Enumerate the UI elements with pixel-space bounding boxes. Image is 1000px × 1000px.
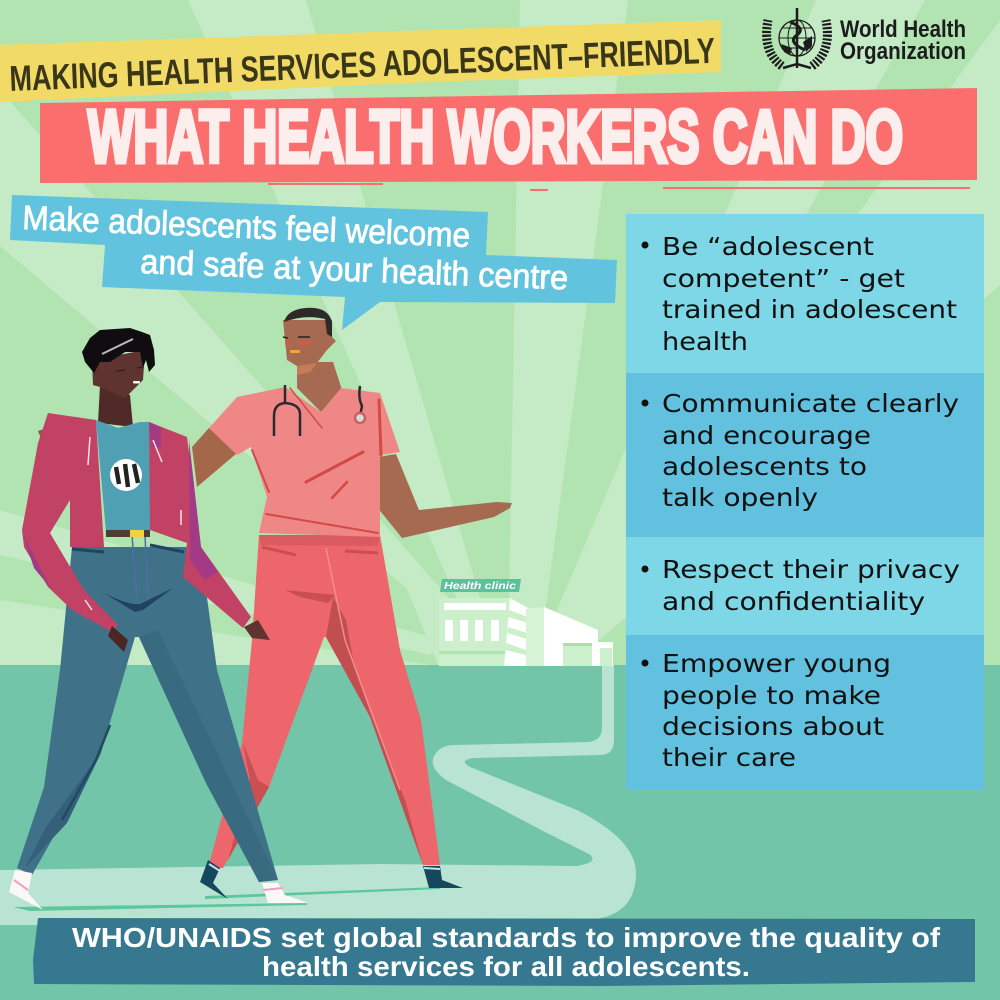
action 1: competent” - get bbox=[662, 264, 905, 293]
nurse shoes bbox=[200, 860, 463, 899]
foot shadows bbox=[13, 887, 440, 911]
action 4: their care bbox=[662, 743, 796, 772]
hand bbox=[108, 626, 128, 652]
neck and head bbox=[82, 328, 155, 427]
action 2 bbox=[626, 373, 984, 537]
nurse neck and head bbox=[283, 308, 342, 412]
action 4: people to make bbox=[662, 681, 881, 710]
shoes white bbox=[9, 870, 308, 910]
action 3 bbox=[626, 537, 984, 635]
panel: actions bbox=[626, 214, 984, 790]
action 1: Be “adolescent bbox=[662, 232, 874, 261]
speech bubble bbox=[10, 195, 617, 330]
footer banner: WHO/UNAIDS set global standards to improve the quality of bbox=[72, 922, 941, 953]
action 1 bbox=[626, 214, 984, 373]
speech bubble: Make adolescents feel welcome bbox=[22, 199, 471, 255]
yellow banner: MAKING HEALTH SERVICES ADOLESCENT–FRIENDLY bbox=[9, 30, 716, 99]
action 1: health bbox=[662, 327, 748, 356]
nurse left arm bbox=[38, 427, 52, 441]
young person bbox=[9, 328, 308, 910]
clinic label: Health clinic bbox=[444, 581, 517, 592]
WHO emblem bbox=[767, 8, 827, 68]
t-shirt bbox=[96, 420, 150, 537]
jacket bbox=[22, 413, 251, 632]
action 3: and confidentiality bbox=[662, 587, 925, 616]
nurse bbox=[38, 308, 512, 868]
action 4: Empower young bbox=[662, 649, 891, 678]
nurse scrub top bbox=[209, 387, 400, 537]
WHO name: World Health bbox=[840, 16, 966, 43]
clinic label bbox=[440, 579, 521, 592]
nurse right arm bbox=[377, 454, 512, 538]
action 1: trained in adolescent bbox=[662, 295, 957, 324]
WHO name: Organization bbox=[840, 38, 966, 65]
footer banner bbox=[33, 918, 975, 986]
action 3: Respect their privacy bbox=[662, 555, 960, 584]
WHO logo bbox=[767, 8, 966, 68]
path to clinic bbox=[0, 665, 636, 925]
jeans bbox=[17, 535, 278, 882]
action 2: Communicate clearly bbox=[662, 389, 959, 418]
stethoscope bbox=[274, 385, 365, 436]
nurse trousers bbox=[208, 535, 440, 868]
shirt badge bbox=[110, 459, 142, 491]
WHO name bbox=[840, 16, 966, 65]
action 2: talk openly bbox=[662, 483, 818, 512]
clinic building bbox=[439, 579, 613, 666]
action 4: decisions about bbox=[662, 712, 884, 741]
action 4 bbox=[626, 635, 984, 790]
footer banner: health services for all adolescents. bbox=[262, 951, 750, 982]
action 2: adolescents to bbox=[662, 452, 867, 481]
action 2: and encourage bbox=[662, 421, 871, 450]
speech bubble: and safe at your health centre bbox=[140, 243, 569, 297]
